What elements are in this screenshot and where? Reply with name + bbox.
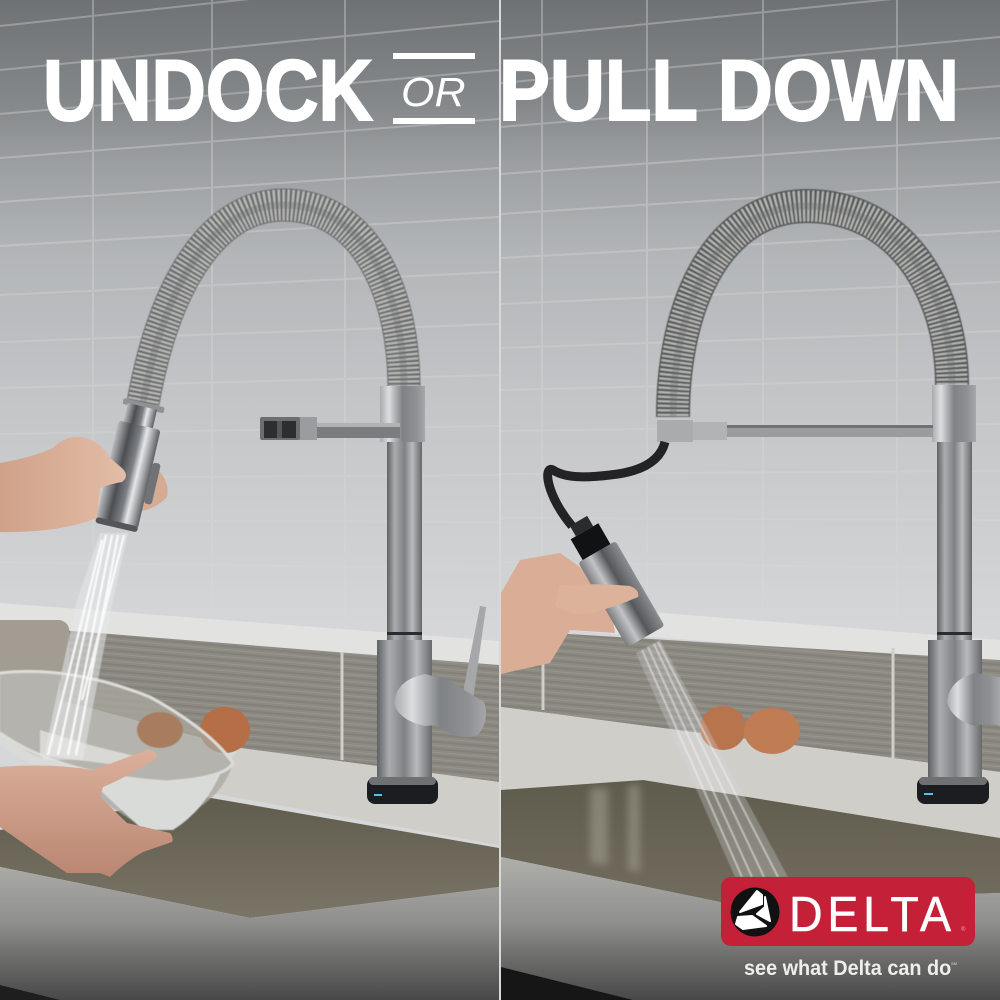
backsplash band left xyxy=(60,630,499,782)
water stream right xyxy=(636,640,788,877)
white trim left xyxy=(0,603,499,666)
sink right xyxy=(501,780,1000,902)
faucet left xyxy=(95,205,486,804)
title word: UNDOCK: UNDOCK xyxy=(43,43,373,139)
title phrase: PULL DOWN: PULL DOWN xyxy=(499,43,959,139)
sink left xyxy=(0,797,499,918)
logo wordmark: DELTA xyxy=(789,888,956,942)
logo: Delta xyxy=(721,877,975,980)
spray head left xyxy=(96,398,164,532)
spray head right xyxy=(560,510,665,647)
counter right xyxy=(501,707,1000,840)
column left xyxy=(387,440,422,640)
hand upper left xyxy=(0,437,126,532)
panel divider xyxy=(499,0,501,1000)
egg left xyxy=(200,707,250,753)
bowl xyxy=(0,671,233,832)
black hose xyxy=(548,442,665,526)
column right xyxy=(937,440,972,640)
tile grid left xyxy=(0,0,499,388)
hand lower left xyxy=(0,750,173,877)
logo plate xyxy=(721,877,975,946)
title word: OR: OR xyxy=(401,69,466,115)
pot xyxy=(0,620,69,672)
tagline: see what Delta can do xyxy=(744,958,951,980)
hose arch right xyxy=(673,206,952,417)
black base left xyxy=(367,777,438,804)
hose arch left xyxy=(143,205,404,403)
front counter right xyxy=(501,857,1000,1000)
front counter left xyxy=(0,867,499,1000)
egg in bowl xyxy=(137,712,183,748)
arm right xyxy=(657,420,933,442)
registered mark: ® xyxy=(961,926,966,933)
backsplash band right xyxy=(501,630,1000,772)
lever left xyxy=(394,606,486,737)
title xyxy=(43,43,959,139)
black base right xyxy=(917,777,989,804)
lever right xyxy=(947,673,1000,726)
panel: pull down (right photo) xyxy=(501,0,1000,1000)
water stream left xyxy=(43,533,128,760)
eggs right xyxy=(700,706,800,754)
base right xyxy=(928,640,982,777)
faucet right xyxy=(548,206,1000,804)
white trim right xyxy=(570,612,1000,660)
hand right xyxy=(501,553,615,674)
sink highlights xyxy=(590,785,640,872)
service mark: SM xyxy=(951,961,957,966)
icon: delta mark xyxy=(730,888,780,936)
tile grid right xyxy=(501,0,1000,388)
LED left xyxy=(374,794,382,796)
counter left xyxy=(205,748,499,845)
title word: OR xyxy=(393,53,475,124)
thumb right xyxy=(555,584,638,614)
finger behind head xyxy=(142,470,168,511)
collar left xyxy=(380,386,425,442)
base left xyxy=(377,640,432,780)
collar right xyxy=(932,385,976,442)
LED right xyxy=(924,793,933,795)
panel: undock (left photo) xyxy=(0,0,499,1000)
dock arm xyxy=(260,417,400,440)
